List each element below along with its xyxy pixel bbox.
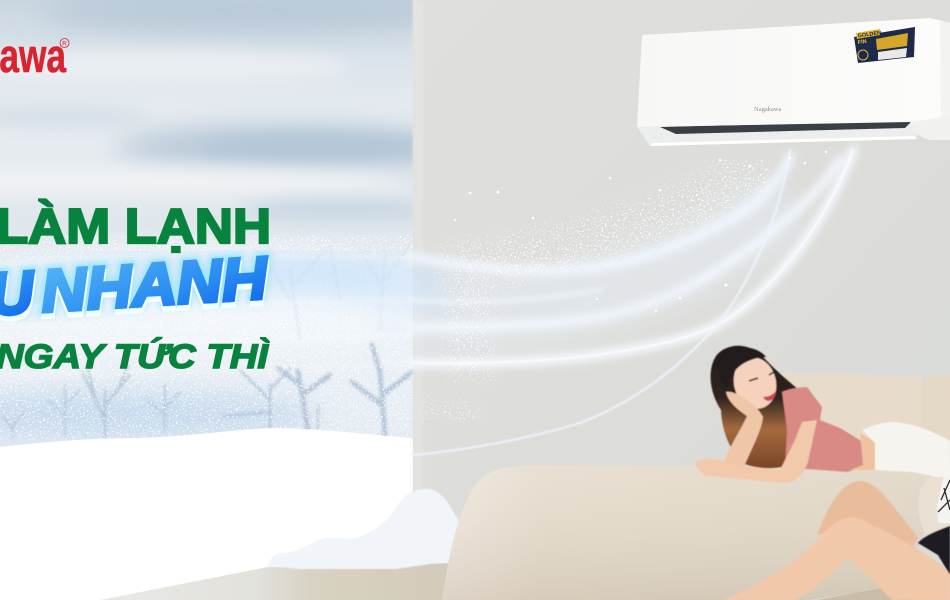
wall snow particles [420, 160, 770, 420]
floor rug [817, 586, 912, 600]
side cushion [918, 470, 950, 533]
sofa back right cushion [921, 375, 950, 445]
left snow particles [0, 235, 413, 440]
heading: SIÊU NHANH: NHANH [40, 249, 271, 330]
right end cap [910, 116, 950, 140]
golden fin badge [854, 27, 915, 63]
golden fin badge: FIN [857, 39, 867, 46]
pink shirt [782, 387, 863, 472]
wide cold air glow [0, 273, 430, 300]
heading block [0, 200, 271, 376]
panel: winter sky background [0, 0, 413, 447]
sofa seat shading [442, 465, 931, 600]
wall left highlight [413, 0, 423, 600]
air stream curves [0, 150, 853, 455]
black shorts [918, 526, 950, 575]
snow mound [268, 489, 465, 569]
large snow flecks [454, 67, 894, 312]
hair [711, 346, 805, 468]
indoor unit body [637, 18, 950, 127]
air conditioner [637, 18, 950, 146]
white shorts [862, 422, 950, 477]
floor strip [100, 563, 450, 600]
woman on sofa [695, 346, 950, 600]
brand on unit: Nagakawa [754, 106, 782, 113]
heading: NGAY TỨC THÌ: NGAY TỨC THÌ [0, 338, 270, 376]
resting arm and hand [695, 420, 817, 483]
sofa back [776, 373, 922, 478]
midriff [850, 433, 875, 470]
eyes [749, 372, 774, 381]
back leg [817, 481, 918, 546]
heading: LÀM LẠNH: LÀM LẠNH [0, 200, 271, 254]
heading: SIÊU NHANH: NHANH [39, 244, 271, 325]
logo: Nagakawa: R [62, 40, 67, 48]
golden fin badge: GOLDEN [857, 30, 882, 39]
smile [763, 391, 776, 401]
louvre and vent [637, 122, 925, 146]
panel: snow ground [0, 428, 413, 600]
sofa seat [442, 465, 931, 600]
face [728, 353, 782, 413]
hairline [718, 347, 766, 388]
panel: wall [413, 0, 950, 600]
heading: SIÊU NHANH: NHANH [39, 244, 271, 325]
heading: SIÊU NHANH [0, 244, 271, 339]
raised arm and hand [723, 392, 763, 467]
panel: frosted tree line [2, 294, 413, 440]
patterned pillow [937, 462, 950, 523]
panel: sofa [442, 373, 950, 600]
front leg [723, 517, 950, 600]
